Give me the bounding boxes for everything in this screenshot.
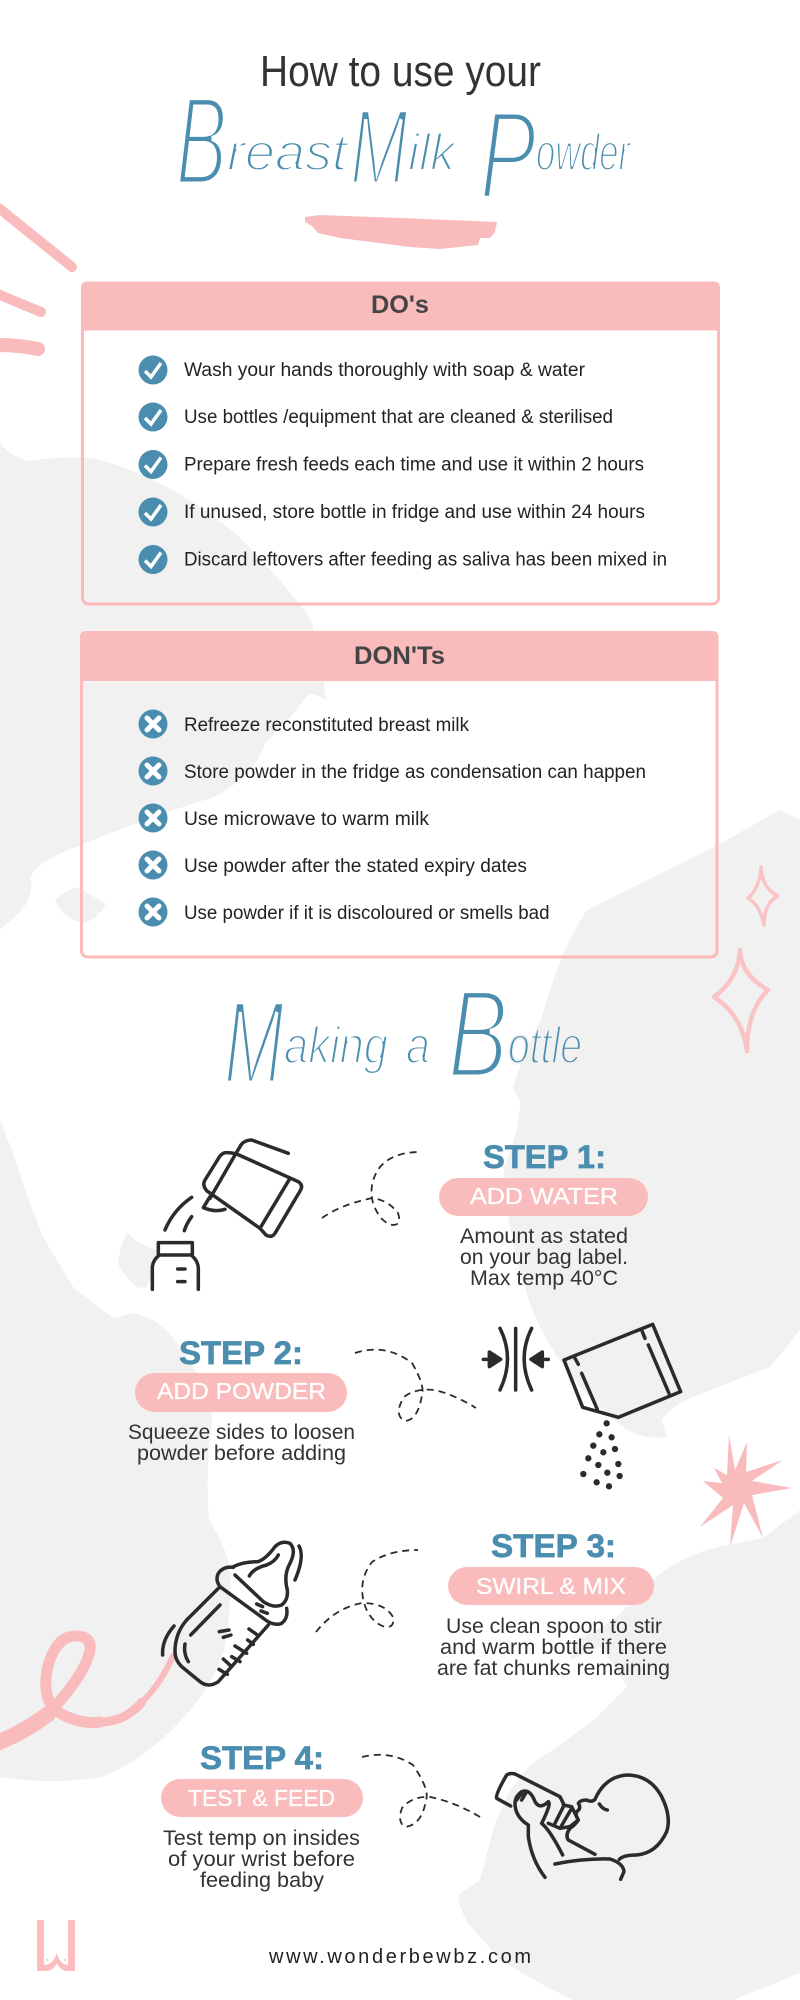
heading: making a bottle: M bbox=[224, 977, 284, 1109]
script title: B bbox=[176, 72, 227, 211]
panel: do's bbox=[81, 282, 720, 604]
step 3 heading: STEP 3: bbox=[491, 1528, 616, 1564]
step 1 pill bbox=[439, 1178, 648, 1216]
don't item 5 bbox=[138, 898, 550, 926]
do item 2 bbox=[138, 402, 613, 432]
script title: M bbox=[350, 86, 408, 207]
step 4 text: feeding baby bbox=[200, 1869, 325, 1892]
step 1 text: Max temp 40°C bbox=[470, 1267, 618, 1290]
step 4 pill bbox=[161, 1779, 363, 1817]
heading: making a bottle: B bbox=[448, 965, 508, 1104]
step 1 heading: STEP 1: bbox=[483, 1139, 606, 1175]
step 2 text bbox=[128, 1421, 355, 1465]
step 1 pill: ADD WATER bbox=[470, 1183, 618, 1209]
don't item 1 bbox=[138, 710, 469, 738]
step 4 heading: STEP 4: bbox=[200, 1740, 324, 1776]
icon: sparkle stars bbox=[714, 867, 778, 1051]
heading: making a bottle: a bbox=[406, 1017, 430, 1075]
script title: P bbox=[480, 86, 536, 225]
title bbox=[176, 47, 632, 225]
do item 1: Wash your hands thoroughly with soap & water bbox=[184, 360, 586, 381]
step 1 text bbox=[460, 1225, 628, 1290]
decorative rays bbox=[0, 205, 72, 349]
dashed arrow 1 bbox=[322, 1152, 420, 1225]
step 3 text bbox=[437, 1615, 670, 1680]
do item 3 bbox=[138, 450, 644, 479]
step 3 text: are fat chunks remaining bbox=[437, 1657, 670, 1680]
script title: owder bbox=[536, 124, 632, 182]
step 1 text: Amount as stated bbox=[460, 1225, 628, 1248]
logo bbox=[37, 1920, 75, 1971]
heading: making a bottle: aking bbox=[284, 1017, 388, 1075]
step 3 pill: SWIRL & MIX bbox=[476, 1573, 626, 1599]
step 2 text: Squeeze sides to loosen bbox=[128, 1421, 355, 1444]
icon: pink starburst bbox=[700, 1435, 792, 1547]
do item 5 bbox=[138, 545, 667, 574]
step 4 text bbox=[163, 1827, 360, 1892]
step 3 bbox=[163, 1528, 670, 1685]
step 2 pill bbox=[135, 1373, 347, 1412]
step 2 text: powder before adding bbox=[137, 1442, 346, 1465]
dashed arrow 2 bbox=[355, 1350, 476, 1421]
step 1 bbox=[152, 1139, 648, 1290]
icon: pouring water bbox=[152, 1140, 302, 1289]
don't item 2: Store powder in the fridge as condensation can happen bbox=[184, 762, 646, 783]
step 4 bbox=[161, 1740, 668, 1892]
script title: reast bbox=[227, 124, 350, 182]
step 2 bbox=[128, 1324, 681, 1489]
step 4 pill: TEST & FEED bbox=[188, 1785, 335, 1811]
don't item 3 bbox=[138, 804, 429, 832]
don't item 4: Use powder after the stated expiry dates bbox=[184, 856, 527, 877]
do item 4 bbox=[138, 498, 645, 526]
do item 5: Discard leftovers after feeding as saliva has been mixed in bbox=[184, 550, 667, 570]
dashed arrow 4 bbox=[362, 1755, 480, 1827]
website: www.wonderbewbz.com bbox=[268, 1946, 531, 1968]
icon: baby bottle bbox=[163, 1542, 301, 1685]
script title: ilk bbox=[408, 124, 458, 182]
script title bbox=[176, 72, 632, 225]
heading: do's: DO's bbox=[371, 291, 429, 319]
heading: making a bottle bbox=[224, 965, 582, 1109]
title: How to use your bbox=[260, 47, 541, 96]
icon: feeding baby bbox=[496, 1774, 668, 1879]
don't item 5: Use powder if it is discoloured or smells bad bbox=[184, 903, 550, 924]
step 3 text: and warm bottle if there bbox=[440, 1636, 667, 1659]
background paint blobs bbox=[0, 443, 800, 2000]
do item 4: If unused, store bottle in fridge and use within 24 hours bbox=[184, 502, 645, 523]
do item 3: Prepare fresh feeds each time and use it within 2 hours bbox=[184, 454, 644, 476]
step 4 text: of your wrist before bbox=[168, 1848, 355, 1871]
heading: don'ts: DON'Ts bbox=[354, 642, 445, 670]
don't item 3: Use microwave to warm milk bbox=[184, 809, 429, 830]
step 2 pill: ADD POWDER bbox=[157, 1378, 326, 1404]
heading: making a bottle: ottle bbox=[508, 1017, 582, 1075]
do item 2: Use bottles /equipment that are cleaned & sterilised bbox=[184, 407, 613, 428]
icon: pink swirl bbox=[0, 1636, 173, 1745]
step 4 text: Test temp on insides bbox=[163, 1827, 360, 1850]
icon: squeezing and pouring powder bag bbox=[483, 1324, 681, 1489]
step 3 pill bbox=[448, 1567, 654, 1605]
dashed arrow 3 bbox=[316, 1550, 418, 1632]
brush stroke bbox=[305, 215, 497, 249]
step 3 text: Use clean spoon to stir bbox=[446, 1615, 662, 1638]
step 1 text: on your bag label. bbox=[460, 1246, 628, 1269]
do item 1 bbox=[138, 356, 586, 384]
panel: don'ts bbox=[80, 631, 718, 957]
step 2 heading: STEP 2: bbox=[179, 1335, 303, 1371]
don't item 1: Refreeze reconstituted breast milk bbox=[184, 715, 469, 736]
don't item 4 bbox=[138, 850, 527, 880]
don't item 2 bbox=[138, 756, 646, 786]
